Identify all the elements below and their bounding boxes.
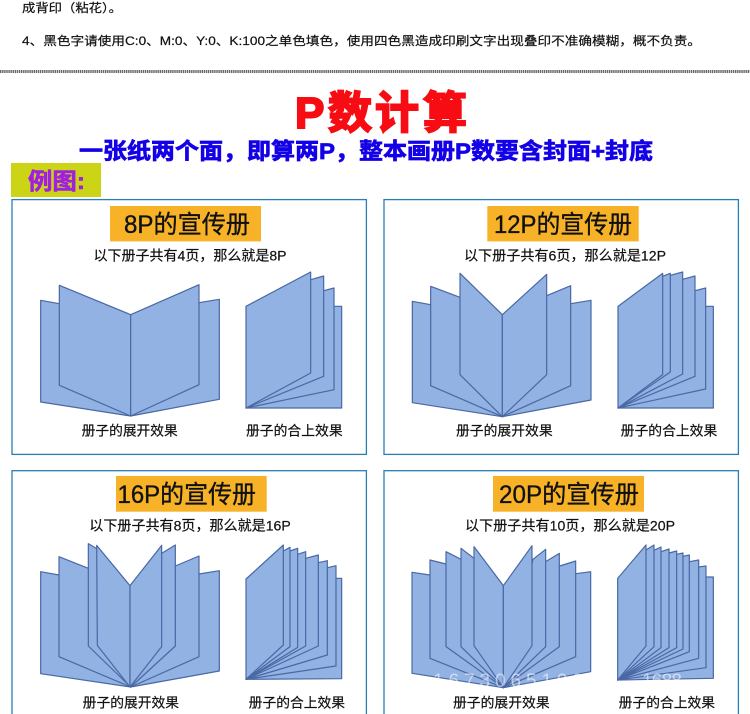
heading: 8P: 8P的宣传册 <box>124 211 250 239</box>
icon: open book 8P <box>41 285 219 416</box>
icon: open book 20P <box>412 546 591 688</box>
text: 8P description: 以下册子共有4页，那么就是8P <box>94 248 286 264</box>
text: note continuation: 成背印（粘花）。 <box>22 0 122 15</box>
icon: closed book 12P <box>618 272 713 408</box>
icon: closed book 16P <box>246 545 342 679</box>
panel: 20P brochure <box>384 471 738 714</box>
panel: 12P brochure <box>384 200 738 454</box>
caption: 16P closed: 册子的合上效果 <box>249 696 345 710</box>
text: 12P description: 以下册子共有6页，那么就是12P <box>464 248 666 264</box>
watermark: 1688 <box>642 671 682 692</box>
example badge: 例图: <box>28 168 85 194</box>
caption: 20P open: 册子的展开效果 <box>453 696 550 710</box>
text: 16P description: 以下册子共有8页，那么就是16P <box>89 518 291 534</box>
icon: closed book 20P <box>618 545 713 680</box>
caption: 12P closed: 册子的合上效果 <box>621 424 718 438</box>
watermark: 1673065102 <box>433 671 583 692</box>
panel: 8P brochure <box>12 200 366 454</box>
example badge <box>11 163 101 197</box>
caption: 20P closed: 册子的合上效果 <box>619 696 715 710</box>
heading: 20P: 20P的宣传册 <box>499 481 639 509</box>
subtitle: 一张纸两个面，即算两P，整本画册P数要含封面+封底 <box>79 139 653 164</box>
heading: 16P: 16P的宣传册 <box>118 481 256 509</box>
watermark <box>433 671 682 692</box>
caption: 16P open: 册子的展开效果 <box>83 696 179 710</box>
panel: 16P brochure <box>12 471 366 714</box>
text: 20P description: 以下册子共有10页，那么就是20P <box>465 518 675 534</box>
text: note 4: 4、黑色字请使用C:0、M:0、Y:0、K:100之单色填色，使用四色黑造成印刷文字出现叠印不准确模糊，概不负责。 <box>22 33 701 48</box>
icon: open book 12P <box>412 273 591 417</box>
icon: closed book 8P <box>246 272 342 408</box>
icon: open book 16P <box>41 544 219 687</box>
caption: 12P open: 册子的展开效果 <box>456 424 553 438</box>
caption: 8P closed: 册子的合上效果 <box>246 424 343 438</box>
heading: 8P <box>110 206 261 241</box>
heading: 12P: 12P的宣传册 <box>494 211 632 239</box>
caption: 8P open: 册子的展开效果 <box>82 424 178 438</box>
title: P数计算 <box>295 89 467 138</box>
